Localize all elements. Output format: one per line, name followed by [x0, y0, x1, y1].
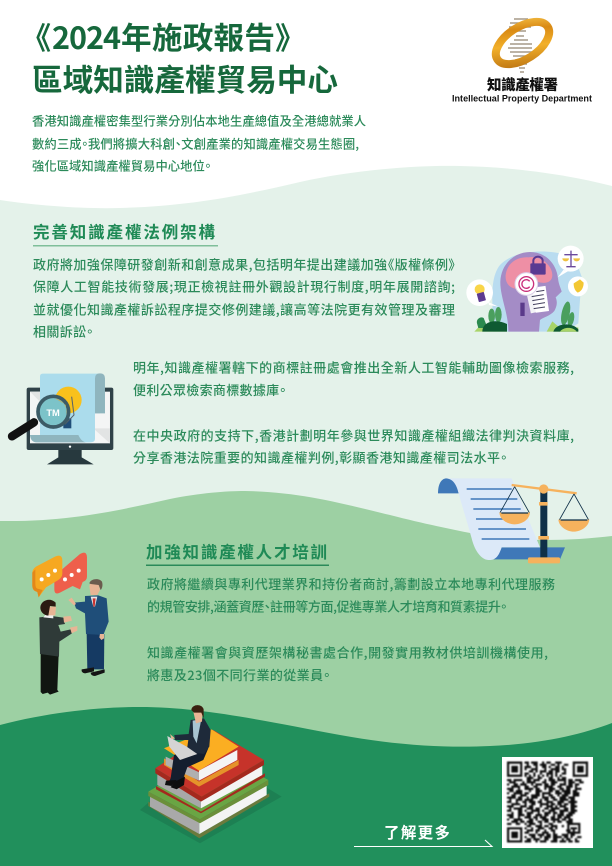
text block: talent training: 知識產權署會與資歷架構秘書處合作,開發實用教材供培訓機構使用, [147, 642, 548, 662]
text block: legal framework: 保障人工智能技術發展;現正檢視註冊外觀設計現行制度,明年展開諮詢; [33, 276, 455, 296]
icon: stack of books [148, 729, 269, 838]
icon: two businessmen talking [32, 553, 109, 695]
icon: businessman with laptop sitting on book stack [140, 705, 282, 843]
background wave: dark green [0, 707, 612, 866]
intro paragraph: 強化區域知識產權貿易中心地位。 [32, 156, 211, 174]
text block: talent training: 政府將繼續與專利代理業界和持份者商討,籌劃設立本地專利代理服務 [147, 574, 555, 593]
icon label: TM: TM [46, 408, 60, 418]
icon: scroll and scales of justice [438, 478, 589, 563]
logo Chinese name: 知識產權署 [487, 74, 558, 95]
text block: legal framework [33, 254, 455, 340]
icon: head with brain and copyright [466, 246, 588, 332]
icon: speech bubbles [32, 553, 87, 597]
intro paragraph [32, 112, 366, 174]
QR code [502, 757, 593, 848]
background wave: mid green [0, 491, 612, 866]
icon: man in blue suit [68, 579, 109, 676]
text block: legal framework: 相關訴訟。 [33, 322, 93, 340]
heading: legal framework: 完善知識產權法例架構 [33, 219, 216, 243]
link: learn more [354, 821, 492, 846]
intro paragraph: 香港知識產權密集型行業分別佔本地生產總值及全港總就業人 [32, 112, 366, 130]
text block: legal framework: 並就優化知識產權訴訟程序提交修例建議,讓高等法院更有效管理及審理 [33, 300, 455, 318]
text block: AI trademark search and case database: 在中央政府的支持下,香港計劃明年參與世界知識產權組織法律判決資料庫, [133, 426, 574, 444]
icon: seated businessman [165, 705, 211, 789]
icon: gold ring [489, 13, 556, 73]
link: learn more: 了解更多 [384, 821, 450, 843]
text block: legal framework: 政府將加強保障研發創新和創意成果,包括明年提出建議加強《版權條例》 [33, 254, 455, 274]
logo: Intellectual Property Department [452, 13, 593, 105]
logo English name: Intellectual Property Department [452, 94, 593, 104]
icon: man in black suit [39, 600, 77, 695]
title: 《 [20, 14, 51, 58]
text block: AI trademark search and case database [133, 358, 574, 466]
title: 》 [275, 14, 306, 58]
intro paragraph: 數約三成。我們將擴大科創、文創產業的知識產權交易生態圈, [32, 134, 359, 152]
text block: AI trademark search and case database: 分享香港法院重要的知識產權判例,彰顯香港知識產權司法水平。 [133, 448, 507, 466]
text block: AI trademark search and case database: 便利公眾檢索商標數據庫。 [133, 380, 286, 399]
icon: trademark search on monitor [12, 373, 113, 464]
panel: talent training [146, 539, 555, 684]
arrow [354, 840, 492, 846]
text block: AI trademark search and case database: 明年,知識產權署轄下的商標註冊處會推出全新人工智能輔助圖像檢索服務, [133, 358, 574, 376]
text block: talent training [147, 574, 555, 684]
title: 2024 [52, 14, 121, 58]
heading: talent training: 加強知識產權人才培訓 [146, 539, 327, 563]
panel: legal framework [33, 219, 455, 340]
icon: striped globe [508, 19, 532, 72]
title: 年施政報告 [121, 14, 275, 58]
title [20, 14, 338, 100]
text block: talent training: 將惠及23個不同行業的從業員。 [147, 665, 330, 684]
title: 區域知識產權貿易中心 [32, 56, 338, 100]
text block: talent training: 的規管安排,涵蓋資歷、註冊等方面,促進專業人才培育和質素提升。 [147, 596, 507, 616]
